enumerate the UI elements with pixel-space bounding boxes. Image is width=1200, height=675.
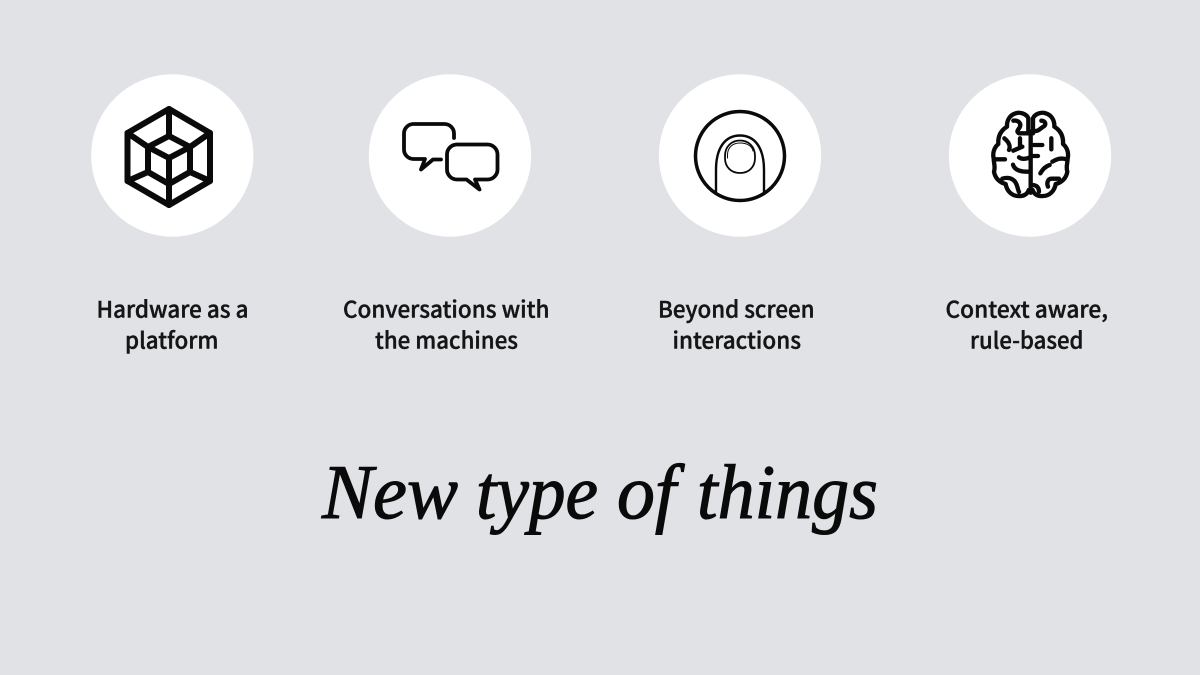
label: hardware as a platform: platform bbox=[125, 324, 218, 356]
title: New bbox=[321, 449, 458, 535]
label: conversations with the machines: Conversations with bbox=[343, 292, 550, 324]
title bbox=[321, 449, 878, 535]
label: context aware, rule-based: rule-based bbox=[970, 324, 1084, 356]
icon: hypercube in white circle bbox=[91, 74, 254, 237]
label: beyond screen interactions bbox=[658, 292, 814, 356]
panel: hardware as a platform bbox=[91, 74, 254, 356]
label: conversations with the machines: the machines bbox=[375, 324, 518, 356]
label: context aware, rule-based: Context aware, bbox=[946, 292, 1108, 324]
title: type bbox=[476, 449, 598, 535]
label: hardware as a platform bbox=[96, 292, 248, 356]
panel: context aware, rule-based bbox=[946, 74, 1111, 356]
label: beyond screen interactions: Beyond screen bbox=[658, 292, 814, 324]
panel: conversations with the machines bbox=[343, 74, 550, 356]
label: beyond screen interactions: interactions bbox=[672, 324, 801, 356]
label: context aware, rule-based bbox=[946, 292, 1108, 356]
label: hardware as a platform: Hardware as a bbox=[96, 292, 248, 324]
icon: brain in white circle bbox=[949, 74, 1111, 237]
icon: fingertip in ring in white circle bbox=[659, 74, 821, 237]
panel: beyond screen interactions bbox=[658, 74, 821, 356]
title: of bbox=[617, 449, 685, 535]
title: things bbox=[697, 449, 878, 535]
label: conversations with the machines bbox=[343, 292, 550, 356]
icon: speech bubbles in white circle bbox=[369, 74, 531, 237]
